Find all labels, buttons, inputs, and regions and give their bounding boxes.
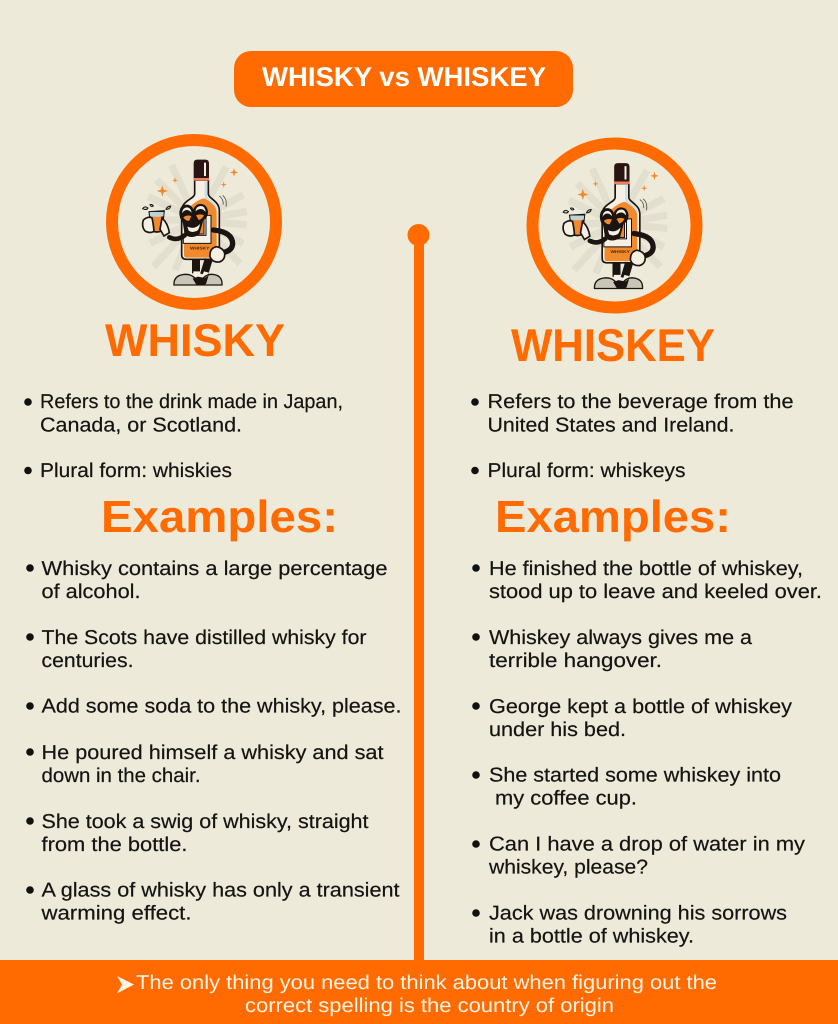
list: whiskey examples: Can I have a drop of water in my — [489, 834, 805, 856]
list: whisky examples: He poured himself a whisky and sat — [42, 742, 384, 764]
text block: whiskey definition: United States and Ireland. — [488, 414, 734, 436]
text block: whisky definition: Refers to the drink made in Japan, — [40, 391, 343, 413]
text block: whiskey definition: Plural form: whiskeys — [488, 460, 686, 482]
list: whiskey examples: in a bottle of whiskey. — [489, 926, 694, 948]
footer banner: The only thing you need to think about when figuring out the — [136, 972, 717, 994]
list: whiskey examples: George kept a bottle of whiskey — [489, 696, 792, 718]
list: whiskey examples: He finished the bottle of whiskey, — [489, 558, 803, 580]
list: whisky examples: centuries. — [42, 650, 134, 672]
list: whisky examples: A glass of whisky has only a transient — [42, 880, 400, 902]
list: whiskey examples: under his bed. — [489, 719, 626, 741]
list: whisky examples: Whisky contains a large percentage — [42, 558, 388, 580]
list: whiskey examples: She started some whiskey into — [489, 764, 781, 786]
list: whiskey examples: Whiskey always gives me a — [489, 627, 753, 649]
label — [183, 215, 211, 243]
text block: whisky definition: Plural form: whiskies — [40, 460, 232, 482]
divider: vertical line with dot — [408, 224, 430, 961]
list: whisky examples: down in the chair. — [42, 765, 200, 787]
text block: whiskey definition: Refers to the beverage from the — [488, 391, 794, 413]
heading: WHISKY: WHISKY — [105, 314, 285, 366]
footer banner: correct spelling is the country of origin — [245, 995, 614, 1017]
title — [234, 51, 573, 107]
icon: bottle mascot in circle, whiskey: WHISKY — [610, 249, 630, 254]
list: whisky examples: of alcohol. — [42, 581, 140, 603]
icon: bottle mascot in circle, whisky — [112, 140, 276, 304]
list: whiskey examples: my coffee cup. — [495, 788, 637, 810]
title: WHISKY vs WHISKEY — [262, 62, 546, 92]
heading: examples right: Examples: — [495, 491, 731, 542]
list: whisky examples: from the bottle. — [42, 834, 188, 856]
heading: WHISKEY: WHISKEY — [511, 319, 715, 371]
list: whiskey examples: whiskey, please? — [488, 856, 648, 878]
list: whisky examples: She took a swig of whisky, straight — [42, 811, 369, 833]
list: whisky examples: Add some soda to the whisky, please. — [42, 696, 401, 718]
list: whiskey examples: Jack was drowning his sorrows — [489, 902, 787, 924]
list: whisky examples: warming effect. — [40, 902, 191, 924]
text block: whiskey definition — [471, 391, 794, 482]
icon: bottle mascot in circle, whisky: WHISKY — [190, 246, 209, 251]
footer banner — [0, 960, 838, 1024]
list: whiskey examples — [472, 558, 822, 948]
list: whiskey examples: terrible hangover. — [489, 650, 662, 672]
list: whisky examples: The Scots have distilled whisky for — [42, 627, 367, 649]
list: whisky examples — [26, 558, 401, 924]
text block: whisky definition — [24, 391, 343, 482]
label — [604, 219, 631, 247]
list: whiskey examples: stood up to leave and keeled over. — [489, 581, 822, 603]
heading: examples left: Examples: — [101, 491, 338, 542]
text block: whisky definition: Canada, or Scotland. — [40, 414, 242, 436]
icon: bottle mascot in circle, whiskey — [532, 144, 696, 308]
